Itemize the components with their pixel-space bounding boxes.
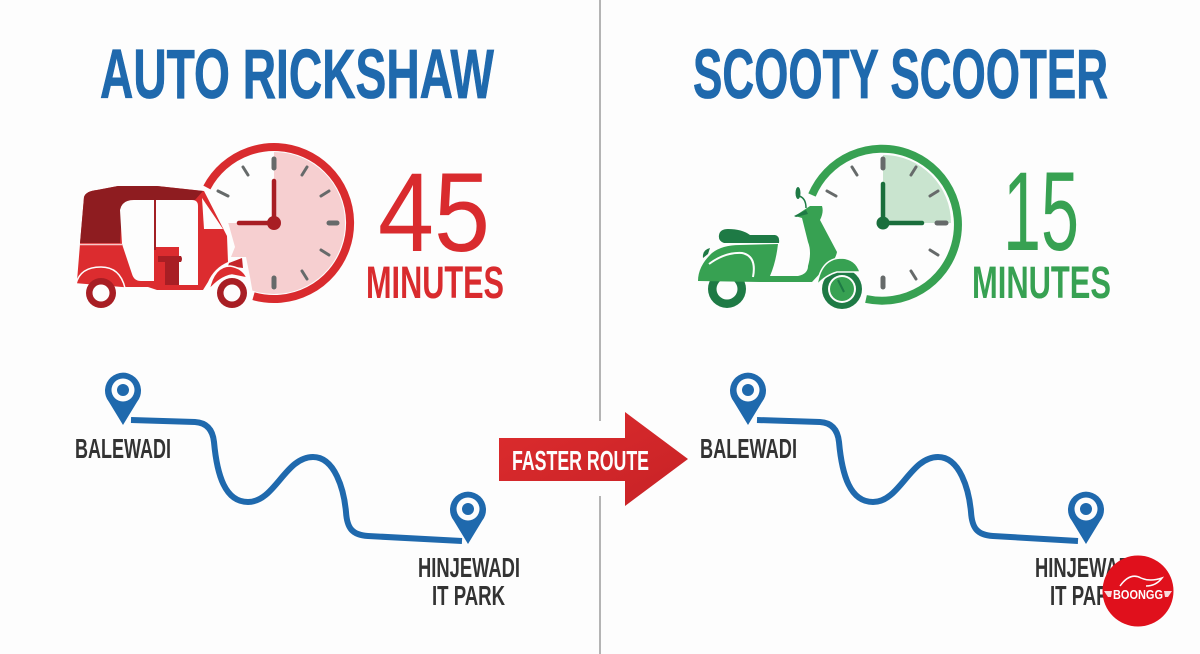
- big number: 15: 15: [1003, 149, 1079, 274]
- label: balewadi: BALEWADI: [75, 433, 171, 464]
- icon: auto rickshaw: [76, 186, 247, 308]
- icon: scooter: [698, 187, 862, 309]
- arrow: faster route: FASTER ROUTE: [512, 445, 649, 476]
- label: hinjewadi it park: HINJEWADI: [418, 552, 520, 583]
- label: hinjewadi it park: HINJEWADI: [1035, 552, 1137, 583]
- clock: 15 minutes: [812, 149, 958, 301]
- pin: hinjewadi: [450, 492, 486, 544]
- watermark badge: [1102, 556, 1174, 626]
- label: balewadi: BALEWADI: [700, 433, 797, 464]
- label: hinjewadi it park: IT PARK: [1050, 580, 1123, 611]
- route map: balewadi to hinjewadi: [75, 373, 520, 611]
- label: hinjewadi it park: IT PARK: [432, 580, 505, 611]
- pin: balewadi: [730, 373, 766, 425]
- label: minutes: MINUTES: [972, 257, 1111, 308]
- watermark badge: BOONGG: [1113, 588, 1163, 602]
- pin: hinjewadi: [1068, 492, 1104, 544]
- arrow: faster route: [499, 412, 688, 506]
- big number: 45: 45: [378, 150, 490, 275]
- panel: auto rickshaw: [75, 35, 520, 611]
- label: hinjewadi it park: [1035, 552, 1137, 611]
- pin: balewadi: [105, 373, 141, 425]
- label: minutes: MINUTES: [366, 257, 504, 308]
- route map: balewadi to hinjewadi: [700, 373, 1137, 611]
- panel: scooty scooter: [693, 35, 1137, 611]
- label: hinjewadi it park: [418, 552, 520, 611]
- clock: 45 minutes: [203, 147, 350, 300]
- heading: auto rickshaw: AUTO RICKSHAW: [100, 35, 494, 113]
